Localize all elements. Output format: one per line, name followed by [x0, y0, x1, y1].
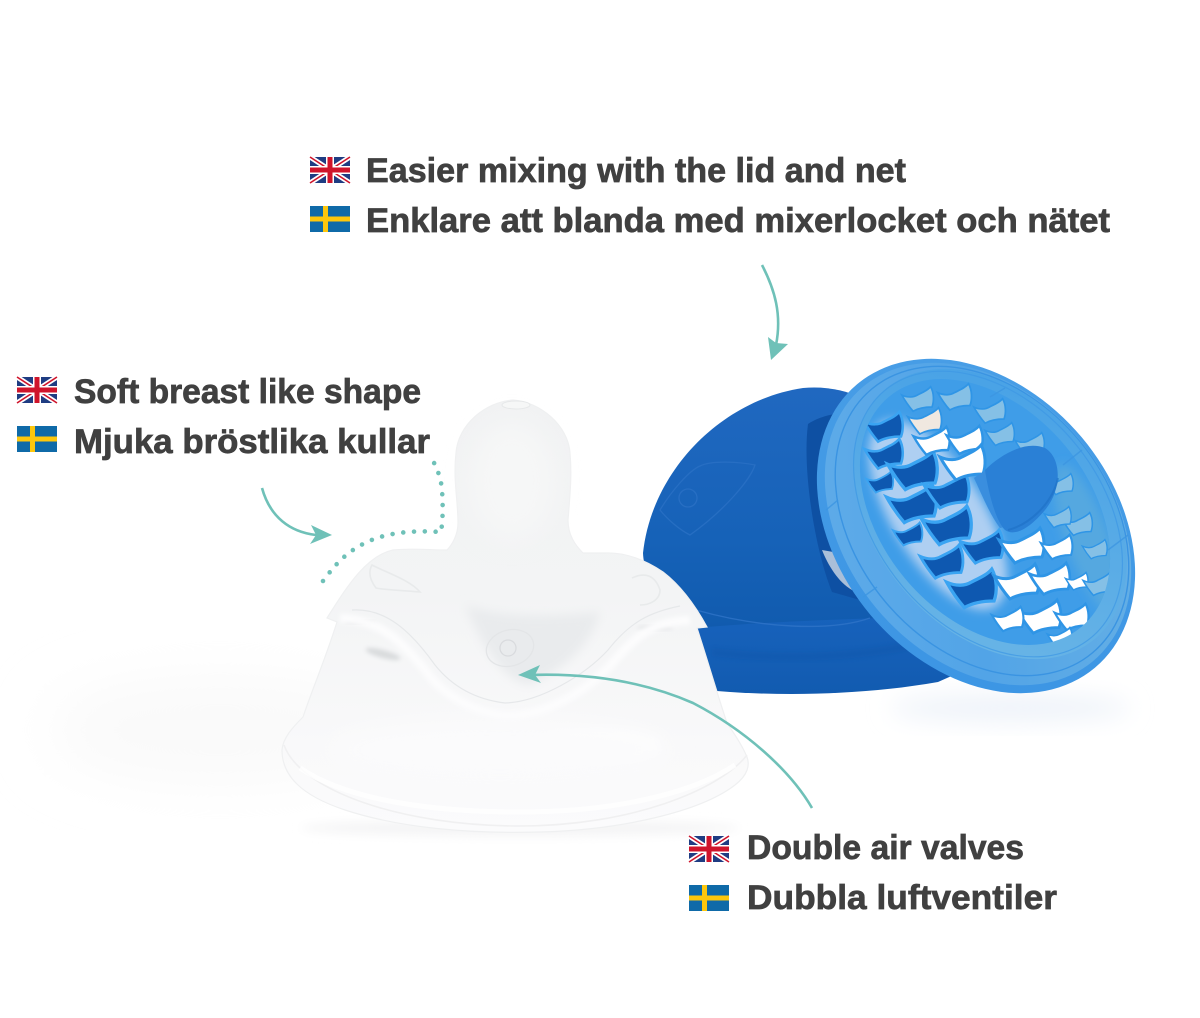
- flag: Sweden: [17, 426, 57, 452]
- teat base rim: [284, 745, 747, 826]
- flag: UK: [689, 836, 729, 862]
- net holes: pale: [902, 384, 1112, 595]
- label: easier mixing: [310, 152, 1110, 240]
- label: soft breast like shape: [17, 373, 430, 461]
- net holes: dark: [864, 412, 1003, 608]
- net strainer ring: [816, 358, 1136, 694]
- ring seam ticks: [826, 388, 1128, 597]
- silicone teat: [282, 400, 748, 832]
- english text: Soft breast like shape: [74, 373, 421, 411]
- label: double air valves: [689, 829, 1057, 917]
- flag: Sweden: [310, 206, 350, 232]
- net knob: [974, 446, 1058, 532]
- infographic canvas: [16, 156, 1136, 911]
- teat air valve: [482, 624, 538, 672]
- english text: Easier mixing with the lid and net: [366, 152, 906, 190]
- rear skirt behind ring: [1072, 645, 1106, 680]
- lid skirt: [695, 616, 1010, 694]
- swedish text: Dubbla luftventiler: [747, 879, 1057, 917]
- soft floor shadow: [50, 680, 1130, 836]
- net opening: [860, 379, 1110, 645]
- swedish text: Mjuka bröstlika kullar: [74, 423, 430, 461]
- dotted outline: breast shape: [323, 459, 443, 581]
- ring inner wall: [797, 315, 1183, 713]
- teat tip: [502, 401, 530, 409]
- flag: UK: [310, 157, 350, 183]
- teat translucent shading: [330, 422, 673, 780]
- teat wave flange: [340, 618, 690, 716]
- arrow: to breast shape: [262, 488, 332, 544]
- flag: UK: [17, 377, 57, 403]
- rocket emboss on dome: [660, 462, 755, 535]
- teat body: [282, 400, 748, 832]
- swedish text: Enklare att blanda med mixerlocket och nätet: [366, 202, 1110, 240]
- english text: Double air valves: [747, 829, 1024, 867]
- arrow: to air valves: [518, 665, 812, 808]
- blue mixer lid: [643, 387, 1106, 694]
- lid window behind ring: [807, 412, 860, 600]
- arrow: to mixer lid: [762, 265, 788, 360]
- ring outer band: [751, 296, 1200, 756]
- net holes: white: [914, 426, 1089, 647]
- lid dome: [643, 387, 960, 640]
- flag: Sweden: [689, 885, 729, 911]
